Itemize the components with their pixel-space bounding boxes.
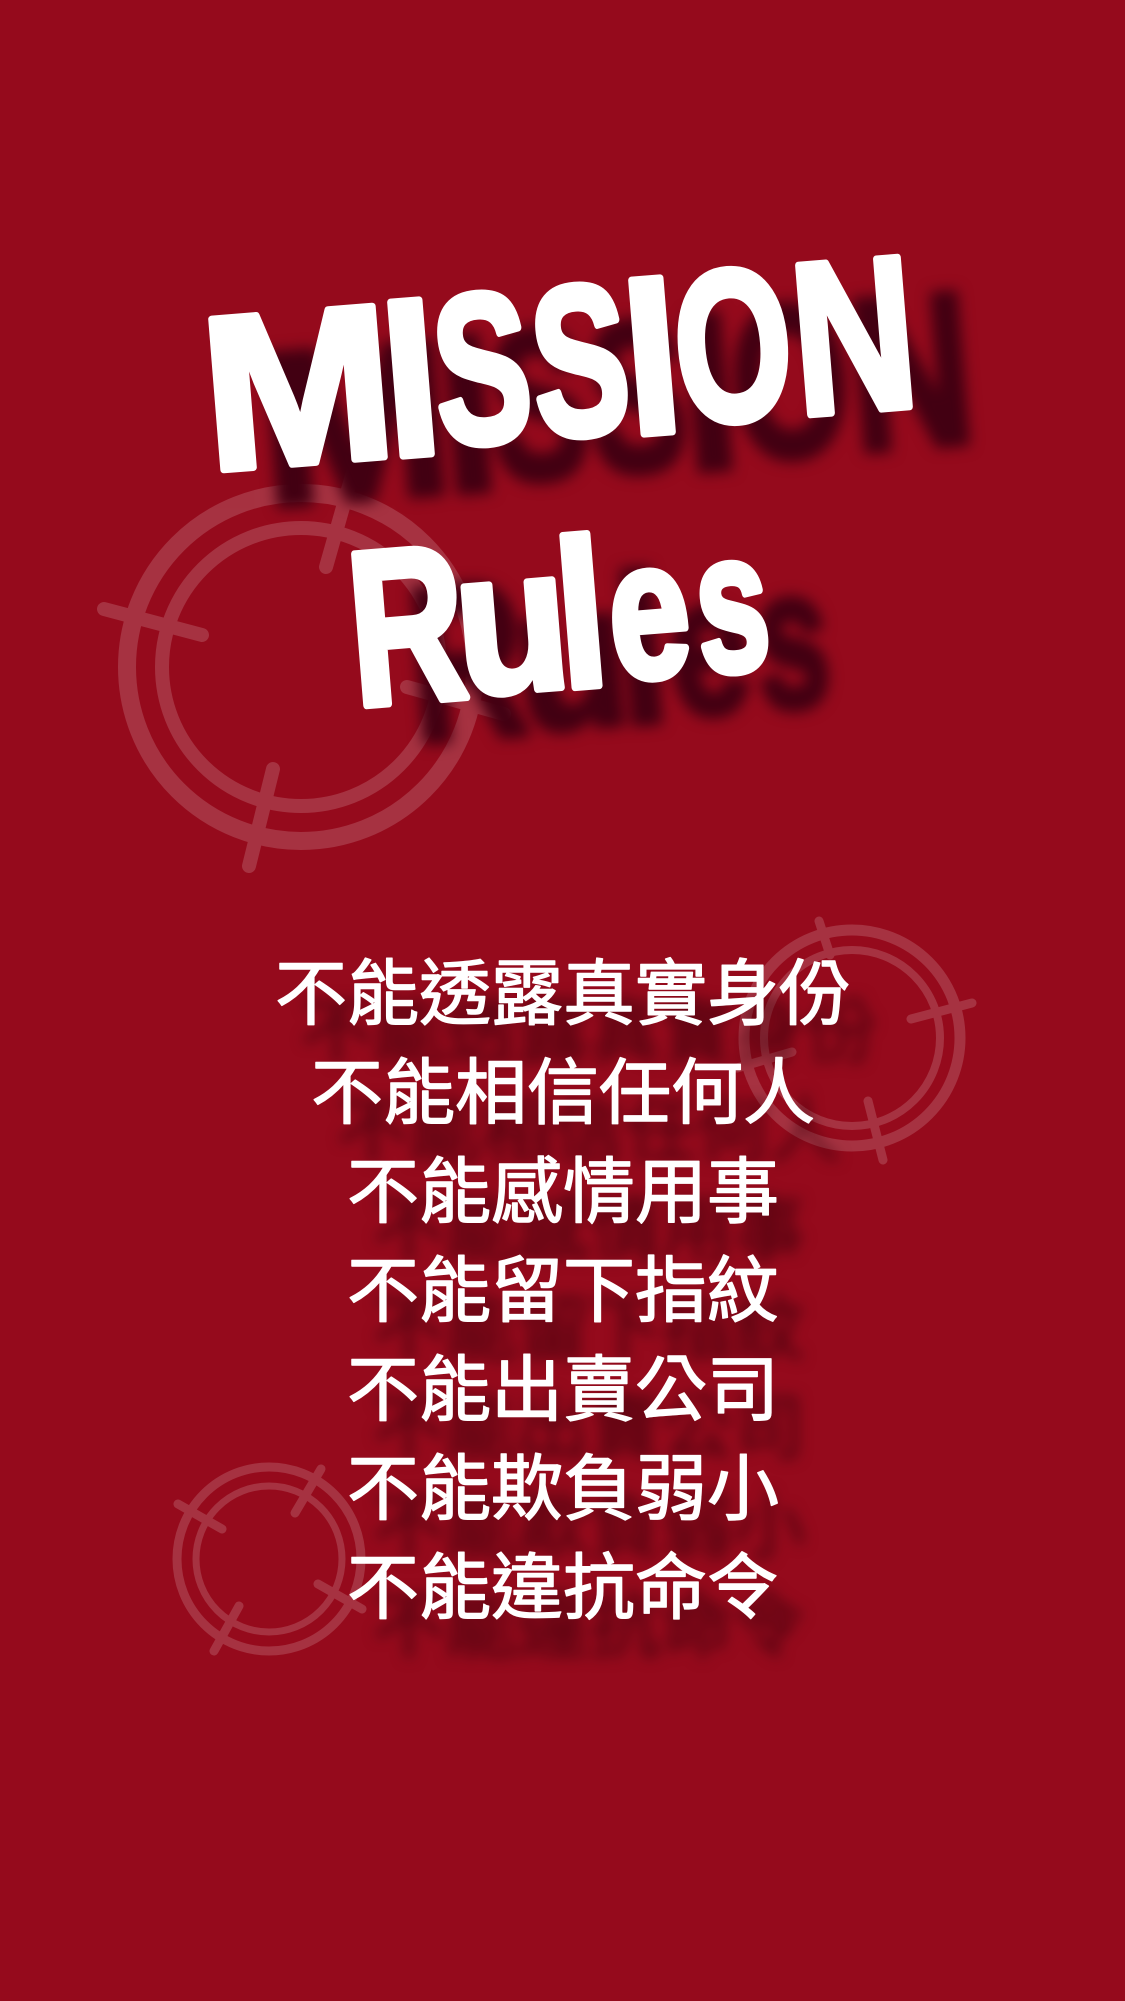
text block: list of rules: 不能欺負弱小 <box>347 1450 779 1530</box>
text block: list of rules <box>275 955 851 1629</box>
title: Rules <box>340 489 777 753</box>
title: Rules: R <box>340 498 474 753</box>
text block: list of rules: 不能出賣公司 <box>347 1351 779 1431</box>
text block: list of rules: 不能相信任何人 <box>311 1054 815 1134</box>
title: MISSION: M <box>193 257 403 518</box>
icon: large crosshair target <box>104 472 504 866</box>
title: MISSION: N <box>783 211 925 462</box>
icon: lower crosshair target <box>177 1467 362 1651</box>
title: MISSION: O <box>665 222 801 471</box>
title: Rules: s <box>687 489 777 716</box>
title: MISSION: S <box>425 245 539 491</box>
text block: list of rules: 不能透露真實身份 <box>275 955 851 1035</box>
text block: list of rules: 不能感情用事 <box>347 1153 779 1233</box>
icon: right crosshair target <box>737 921 972 1160</box>
title: Rules: u <box>446 504 577 739</box>
text block: list of rules: 不能留下指紋 <box>347 1252 779 1332</box>
text block: list of rules: 不能違抗命令 <box>347 1549 779 1629</box>
title: Rules: l <box>547 496 616 733</box>
title: MISSION: S <box>523 237 637 483</box>
title: MISSION: I <box>373 251 449 504</box>
title: Rules: e <box>600 497 698 722</box>
title: MISSION: I <box>614 229 690 482</box>
title: MISSION <box>193 211 925 518</box>
